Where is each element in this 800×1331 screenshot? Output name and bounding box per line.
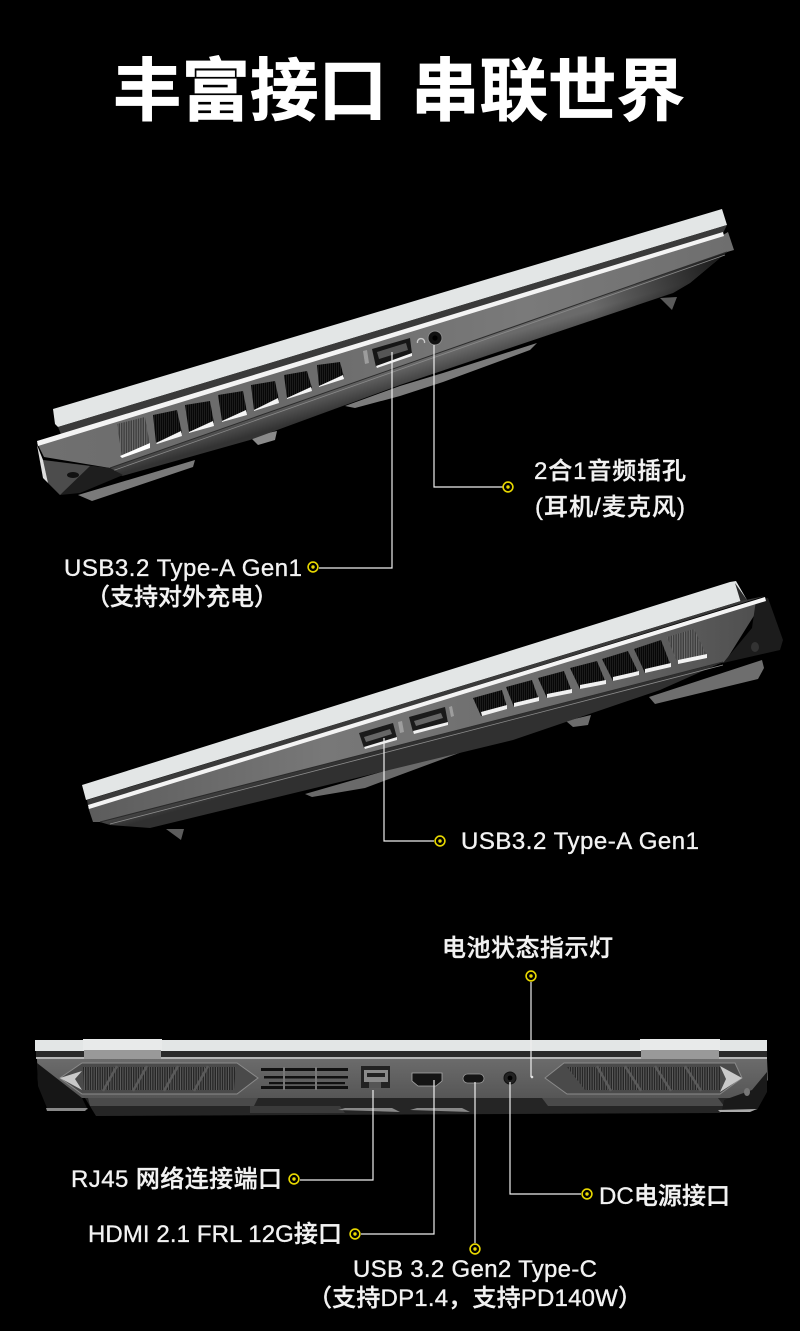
lid	[35, 1040, 767, 1051]
title: 丰富接口	[113, 53, 387, 130]
vents	[473, 640, 671, 716]
lid	[82, 581, 747, 800]
port: USB-A right	[409, 707, 448, 734]
port: USB-A left	[359, 723, 397, 749]
leader line: USB-C	[474, 1082, 476, 1243]
underside	[85, 1098, 735, 1116]
label: USB left	[64, 555, 302, 611]
crease	[100, 662, 723, 822]
port: USB-A	[363, 338, 412, 368]
vents	[153, 362, 344, 444]
lower body panel	[100, 662, 723, 828]
corners	[37, 1063, 88, 1110]
leader line: battery LED	[530, 982, 532, 1077]
port: RJ45	[361, 1066, 390, 1088]
label: USB left: （支持对外充电）	[86, 584, 278, 611]
intake grille	[117, 417, 150, 457]
label: audio jack: (耳机/麦克风)	[535, 494, 685, 521]
lower body panel	[110, 252, 727, 476]
label: DC: DC电源接口	[599, 1183, 730, 1210]
hinge left	[83, 1039, 162, 1059]
leader line: USB pair	[384, 738, 434, 841]
upper body panel	[88, 598, 765, 822]
laptop: right side view	[82, 581, 783, 840]
label: USB left: USB3.2 Type-A Gen1	[64, 555, 302, 582]
left corner wedge	[43, 460, 123, 495]
vent right	[545, 1063, 742, 1094]
rear stand foot	[78, 460, 195, 501]
right corner wedge	[723, 598, 783, 663]
leader line: HDMI	[361, 1080, 434, 1234]
title	[113, 53, 685, 130]
vent left	[60, 1063, 258, 1094]
label: USB pair: USB3.2 Type-A Gen1	[461, 828, 699, 855]
hinge gap	[58, 225, 727, 437]
leader line: USB left	[319, 352, 392, 568]
label: USB-C: USB 3.2 Gen2 Type-C	[353, 1256, 597, 1283]
hinge right	[640, 1039, 720, 1059]
body	[37, 1059, 768, 1098]
laptop: left side view	[37, 209, 734, 501]
label: audio jack	[534, 458, 686, 521]
label: RJ45: RJ45 网络连接端口	[71, 1166, 282, 1193]
leader line: DC	[510, 1082, 581, 1194]
port: DC jack	[504, 1072, 516, 1084]
slot grille	[261, 1067, 348, 1090]
white edge strip	[37, 232, 724, 446]
right end fade	[590, 252, 727, 323]
battery indicator LED	[531, 1076, 533, 1078]
label: audio jack: 2合1音频插孔	[534, 458, 686, 485]
title: 串联世界	[411, 53, 685, 130]
hinge gap	[36, 1051, 767, 1058]
crease highlight	[110, 252, 727, 468]
upper body panel	[37, 232, 734, 468]
laptop: rear view	[35, 1039, 768, 1116]
leader line: RJ45	[300, 1090, 373, 1180]
label: USB-C: （支持DP1.4，支持PD140W）	[308, 1285, 642, 1312]
label: HDMI: HDMI 2.1 FRL 12G接口	[88, 1221, 342, 1248]
port: HDMI	[412, 1073, 442, 1086]
leader line: audio	[434, 345, 503, 487]
hinge gap	[87, 596, 765, 806]
marker dots	[289, 482, 592, 1254]
lid	[53, 209, 727, 427]
port: USB-C	[463, 1074, 484, 1083]
port: audio jack	[417, 331, 442, 345]
intake grille	[667, 629, 707, 664]
label: USB-C	[308, 1256, 642, 1312]
rear stand foot	[649, 660, 764, 704]
label: battery indicator: 电池状态指示灯	[442, 935, 613, 962]
white edge strip	[88, 597, 766, 809]
